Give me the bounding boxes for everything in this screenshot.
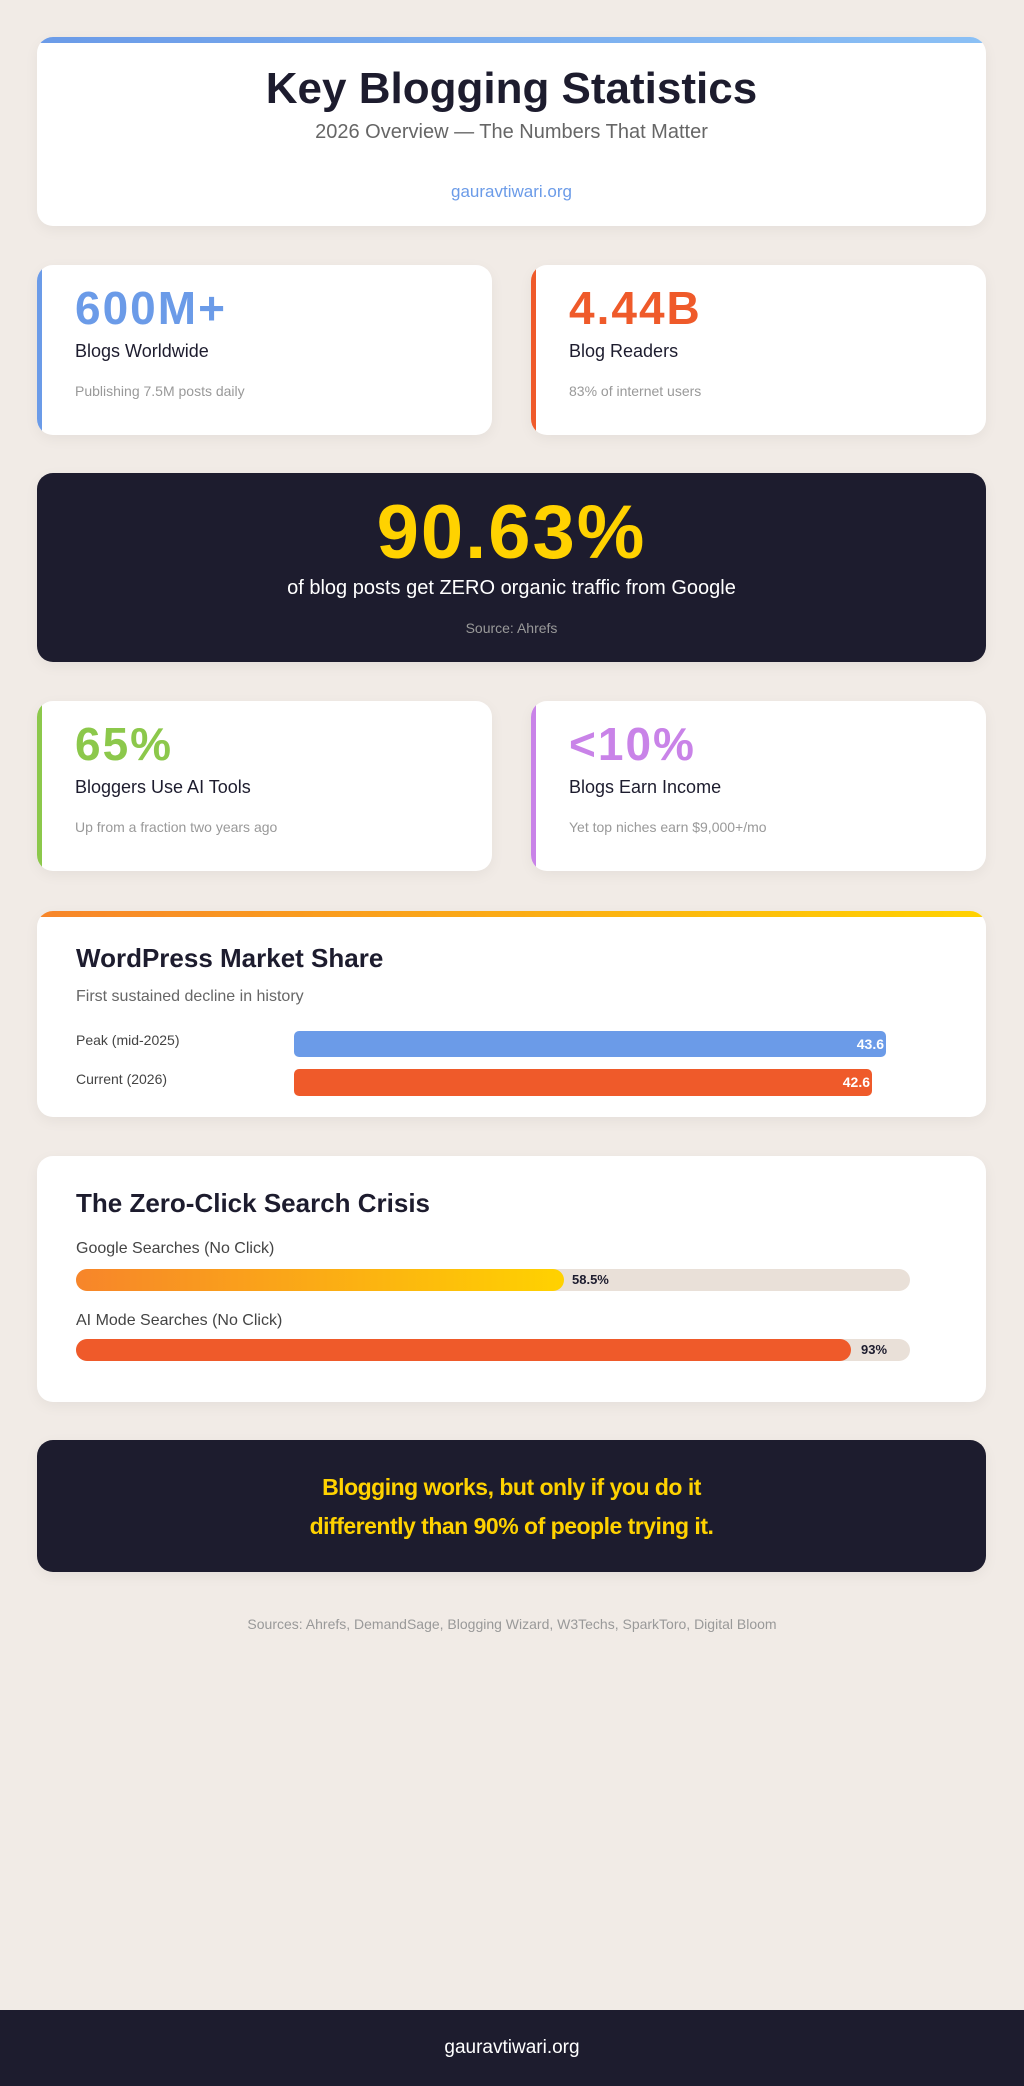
stat card: blog readers: Blog Readers (569, 341, 678, 361)
stat card: blogs worldwide: Blogs Worldwide (75, 341, 209, 361)
footer (0, 2010, 1024, 2086)
highlight: zero traffic (37, 473, 986, 662)
bar: ai mode: 93% (861, 1342, 887, 1357)
panel: wordpress market share: Current (2026) (76, 1071, 167, 1087)
stat card: blogs worldwide: 600M+ (75, 282, 227, 334)
callout quote: Blogging works, but only if you do it (322, 1474, 701, 1500)
stat card: income: Blogs Earn Income (569, 777, 721, 797)
highlight: zero traffic: 90.63% (377, 490, 646, 575)
bar: peak: 43.6 (857, 1036, 884, 1052)
panel: zero-click (37, 1156, 986, 1402)
panel: wordpress market share: First sustained decline in history (76, 988, 304, 1005)
panel: zero-click: The Zero-Click Search Crisis (76, 1188, 430, 1218)
highlight: zero traffic: of blog posts get ZERO organic traffic from Google (287, 577, 736, 599)
stat card: income (531, 701, 986, 871)
panel: zero-click: AI Mode Searches (No Click) (76, 1312, 282, 1329)
sources: Sources: Ahrefs, DemandSage, Blogging Wizard, W3Techs, SparkToro, Digital Bloom (247, 1616, 777, 1632)
stat card: blogs worldwide (37, 265, 492, 435)
stat card: AI tools (37, 701, 492, 871)
bar: peak (294, 1031, 886, 1057)
stat card: AI tools: 65% (75, 718, 173, 770)
header card (37, 37, 986, 226)
bar: google: 58.5% (572, 1272, 609, 1287)
stat card: AI tools: Bloggers Use AI Tools (75, 777, 251, 797)
callout quote: differently than 90% of people trying it. (310, 1513, 713, 1539)
site link: gauravtiwari.org (451, 182, 572, 201)
stat card: blog readers: 83% of internet users (569, 383, 701, 399)
callout quote (37, 1440, 986, 1572)
highlight: zero traffic: Source: Ahrefs (466, 620, 557, 636)
stat card: income: Yet top niches earn $9,000+/mo (569, 819, 767, 835)
bar: google (76, 1269, 910, 1291)
bar: ai mode (76, 1339, 910, 1361)
bar: current (294, 1069, 872, 1096)
stat card: blogs worldwide: Publishing 7.5M posts daily (75, 383, 245, 399)
footer: gauravtiwari.org (444, 2037, 580, 2058)
stat card: AI tools: Up from a fraction two years ago (75, 819, 277, 835)
stat card: income: <10% (569, 718, 696, 770)
bar: current: 42.6 (843, 1074, 870, 1090)
stat card: blog readers: 4.44B (569, 282, 702, 334)
subtitle: 2026 Overview — The Numbers That Matter (315, 121, 708, 143)
panel: zero-click: Google Searches (No Click) (76, 1240, 274, 1257)
panel: wordpress market share: WordPress Market Share (76, 943, 383, 973)
panel: wordpress market share (37, 911, 986, 1117)
title: Key Blogging Statistics (266, 64, 757, 113)
panel: wordpress market share: Peak (mid-2025) (76, 1032, 180, 1048)
stat card: blog readers (531, 265, 986, 435)
